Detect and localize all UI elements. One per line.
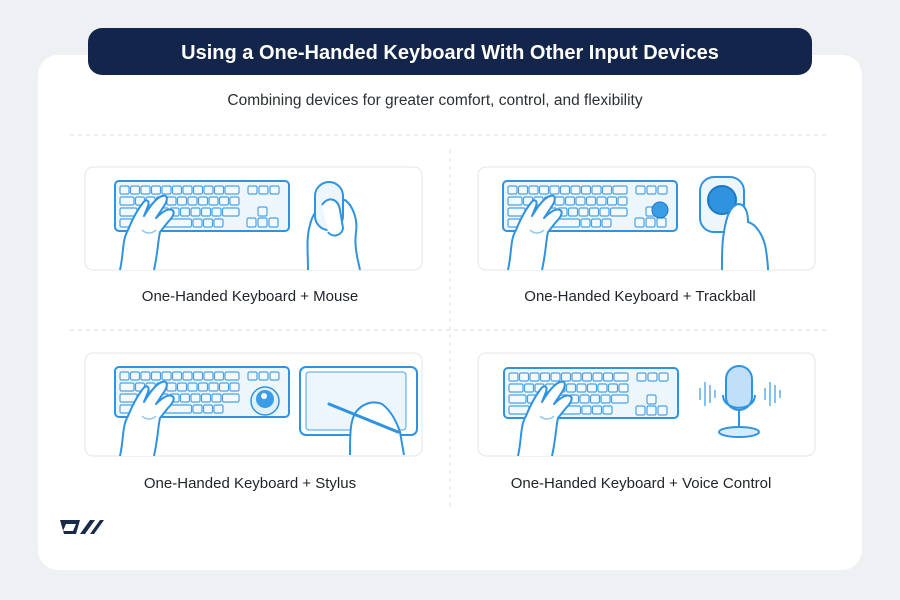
panel: keyboard + mouse [85,167,422,305]
panel: keyboard + stylus [85,353,422,492]
title: Using a One-Handed Keyboard With Other Input Devices [181,42,719,64]
panel: keyboard + voice [478,353,815,492]
icon: hand on keyboard [120,196,174,270]
subtitle: Combining devices for greater comfort, control, and flexibility [227,92,643,109]
label: One-Handed Keyboard + Mouse [142,288,358,305]
card background [38,55,862,570]
panel: keyboard + trackball: One-Handed Keyboard + Trackball [524,288,756,305]
icon: trackball with hand [700,177,768,270]
icon: keyboard [115,181,289,231]
title [88,28,812,75]
panel: keyboard + voice: One-Handed Keyboard + Voice Control [511,475,771,492]
panel: keyboard + trackball [478,167,815,305]
icon: tablet with stylus [300,367,417,455]
logo [60,520,104,534]
icon: microphone [700,366,780,437]
icon: mouse with hand [308,182,360,270]
icon: keyboard trackball [652,202,668,218]
panel: keyboard + stylus: One-Handed Keyboard + Stylus [144,475,356,492]
icon: keyboard trackball [251,387,279,415]
